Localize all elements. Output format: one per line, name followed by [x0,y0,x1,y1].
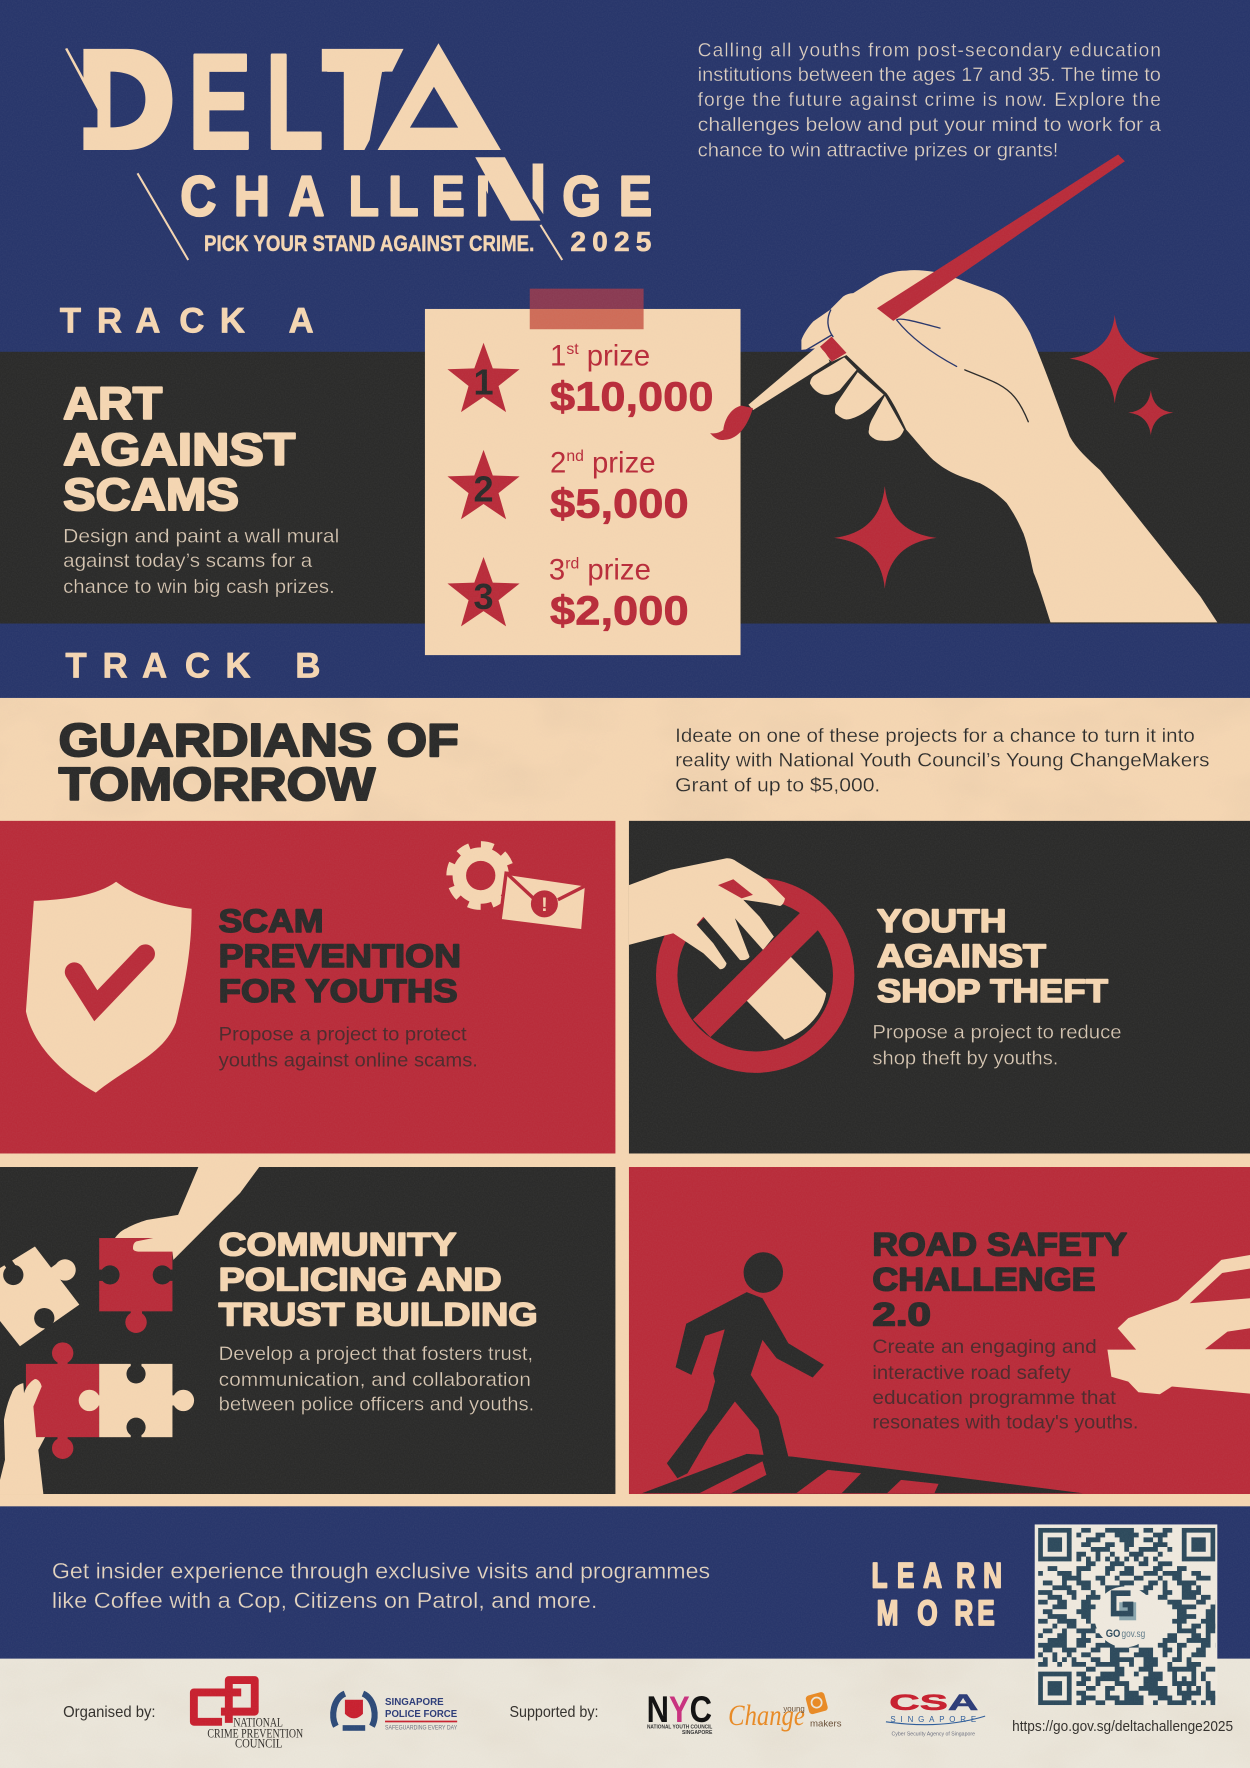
prize 1 [447,339,713,419]
panel background [629,821,1250,1153]
sparkle large [1070,315,1160,404]
GoGov logo disc [1094,1586,1155,1647]
footer paper texture [0,1659,1250,1768]
heading: FOR YOUTHS [219,972,458,1009]
upper red piece [98,1238,174,1333]
upper hand [115,1167,259,1260]
heading: CHALLENGE [872,1260,1096,1297]
logo: National Youth Council: NYC [647,1688,712,1730]
band: navy call to action [0,1506,1250,1659]
panel: Community Policing and Trust Building [0,1167,615,1494]
label: organised by: Organised by: [63,1704,156,1721]
heading: PREVENTION [219,937,461,974]
label: supported by: Supported by: [509,1704,599,1721]
logo: National Crime Prevention Council: CRIME PREVENTION [207,1727,303,1741]
heading [872,1226,1127,1332]
description [872,1337,1138,1434]
title word: DELTA: DELT [92,25,385,177]
prize 1: 1 [474,362,494,403]
QR modules [1038,1528,1225,1705]
intro text: forge the future against crime is now. Explore the [698,90,1161,111]
icon: car [1107,1255,1250,1394]
heading: SCAM [219,902,323,939]
joined red piece [26,1342,99,1459]
tagline: PICK YOUR STAND AGAINST CRIME. [204,231,534,256]
learn more label: LEARN [872,1556,1002,1596]
description: Propose a project to reduce [872,1022,1122,1043]
GoGov logo disc: GO [1106,1628,1121,1640]
heading: Art Against Scams: AGAINST [63,424,296,475]
panel: Scam Prevention for Youths [0,821,615,1153]
call to action text: like Coffee with a Cop, Citizens on Patrol, and more. [52,1588,597,1613]
prize 2: 2 [474,469,494,510]
prize 3: prize [579,554,651,587]
panel: prize note [425,289,741,655]
icon: no sign bar [702,920,810,1028]
logo: National Youth Council: NATIONAL YOUTH COUNCIL [647,1725,712,1731]
brush lower shaft [820,337,846,362]
hand palm and arm [801,270,1217,622]
track B description: reality with National Youth Council’s Young ChangeMakers [675,751,1209,772]
icon: gear and envelope: ! [541,895,548,916]
track B description: Ideate on one of these projects for a chance to turn it into [675,726,1195,747]
logo: Young ChangeMakers: Change [728,1700,805,1732]
prize 1: 1 [550,339,566,372]
description [872,1022,1122,1069]
brush head [710,406,753,440]
learn more label: MORE [877,1593,995,1633]
logo: Young ChangeMakers [728,1691,842,1732]
band: footer paper [0,1659,1250,1768]
band: track B cream backing [0,698,1250,1506]
prize 1: st [566,341,579,358]
description: between police officers and youths. [219,1395,534,1416]
panel background [629,1167,1250,1494]
heading: Art Against Scams: SCAMS [63,469,239,520]
description: education programme that [872,1388,1117,1409]
prize 3: $2,000 [550,588,689,634]
prize 2: nd [566,448,584,465]
description: communication, and collaboration [219,1370,531,1391]
logo: Cyber Security Agency of Singapore: CS A [889,1690,978,1715]
heading: SHOP THEFT [877,972,1108,1009]
prize 3 [447,554,689,634]
call to action text [52,1559,710,1613]
sparkle small [1128,390,1173,435]
prize 2: $5,000 [550,481,689,527]
heading: Art Against Scams: ART [63,378,163,429]
heading [877,902,1108,1009]
lower hand [0,1379,45,1494]
icon: stolen item cap [718,879,753,898]
heading: Guardians of Tomorrow: GUARDIANS OF [59,714,459,766]
logo: Delta Challenge title [65,25,652,260]
prize 3: rd [565,555,579,572]
description: against today’s scams for a [63,550,312,572]
icon: crosswalk [642,1454,1083,1493]
intro text [698,40,1161,162]
tape [530,289,644,329]
heading: COMMUNITY [219,1226,457,1263]
heading: POLICING AND [219,1260,502,1297]
sparkle lower [834,486,937,589]
heading: ROAD SAFETY [872,1226,1127,1263]
QR URL: https://go.gov.sg/deltachallenge2025 [1012,1719,1233,1735]
prize 2: 2 [550,446,566,479]
heading: YOUTH [877,902,1007,939]
paper mottling on cream [0,698,1250,820]
note paper [425,309,741,655]
heading: AGAINST [877,937,1046,974]
heading: 2.0 [872,1295,931,1332]
description [219,1344,534,1416]
icon: reaching hand [629,858,785,969]
logo: Young ChangeMakers: young [783,1705,805,1714]
panel: Art Against Scams [63,378,339,598]
QR code [1035,1524,1225,1705]
joined cream piece [79,1363,194,1438]
middle finger [810,357,857,395]
hand crease lines [807,310,1028,422]
year: 2025 [570,225,651,257]
QR background [1035,1524,1217,1705]
prize 1: $10,000 [550,373,713,419]
loose cream piece [0,1247,79,1346]
heading: Guardians of Tomorrow: TOMORROW [59,758,376,810]
logo: National Crime Prevention Council: NATIONAL [233,1715,283,1729]
heading: Track A: TRACKA [60,302,314,341]
GoGov logo disc: gov.sg [1122,1629,1145,1640]
prize 3: 3 [549,554,565,587]
heading: Guardians of Tomorrow [59,714,459,810]
heading: Art Against Scams [63,378,296,520]
intro text: institutions between the ages 17 and 35. The time to [698,65,1161,86]
title word: CHALLENGE: CHALLENGE [180,165,652,228]
logo: National Crime Prevention Council: COUNCIL [235,1737,282,1751]
intro text: challenges below and put your mind to work for a [698,115,1161,136]
logo: Singapore Police Force: SAFEGUARDING EVERY DAY [385,1725,457,1732]
logo: Cyber Security Agency of Singapore: SINGAPORE [890,1715,976,1724]
logo: Singapore Police Force: POLICE FORCE [385,1709,457,1720]
heading [219,902,461,1009]
icon: gear and envelope [450,845,587,931]
description [219,1025,478,1072]
logo: National Crime Prevention Council [194,1680,303,1751]
description: resonates with today's youths. [872,1413,1138,1434]
logo: Singapore Police Force: SINGAPORE [385,1697,444,1708]
track B description [675,726,1209,797]
band: track A dark band [0,352,1250,624]
prize 3: 3 [474,576,494,617]
panel: Youth Against Shop Theft [629,821,1250,1153]
logo: Singapore Police Force [333,1694,457,1732]
illustration: hand holding brush [710,154,1217,622]
learn more label [872,1556,1002,1633]
description: Create an engaging and [872,1337,1097,1358]
icon: shield with check [26,882,192,1093]
icon: puzzle pieces [0,1167,259,1494]
heading [219,1226,538,1332]
description: Develop a project that fosters trust, [219,1344,533,1365]
intro text: Calling all youths from post-secondary education [698,40,1161,61]
panel background [0,821,615,1153]
track B description: Grant of up to $5,000. [675,776,880,797]
title word: DELTA [65,25,501,177]
brush shaft [877,154,1125,321]
description [63,525,339,598]
description: interactive road safety [872,1363,1071,1384]
icon: lipstick [746,956,826,1040]
logo: Young ChangeMakers: makers [810,1718,842,1728]
description: shop theft by youths. [872,1048,1058,1069]
heading: Track B: TRACKB [65,647,321,686]
prize 2 [447,446,689,527]
icon: pedestrian [667,1252,824,1480]
call to action text: Get insider experience through exclusive visits and programmes [52,1559,710,1584]
prize 1: prize [579,339,650,372]
description: youths against online scams. [219,1051,478,1072]
logo: Cyber Security Agency of Singapore: Cyber Security Agency of Singapore [892,1731,975,1737]
brush handle [748,348,830,410]
panel background [0,1167,615,1494]
logo: National Youth Council: SINGAPORE [682,1730,713,1736]
intro text: chance to win attractive prizes or grants! [698,141,1058,162]
description: Propose a project to protect [219,1025,467,1046]
title word: DELTA: A [406,46,463,173]
ring finger [835,372,884,419]
description: Design and paint a wall mural [63,525,339,547]
slash lines [138,173,562,260]
logo: Cyber Security Agency of Singapore [886,1690,985,1737]
description: chance to win big cash prizes. [63,576,335,598]
prize 2: prize [584,446,656,479]
little finger [869,396,904,441]
icon: no sign ring [667,889,844,1062]
heading: TRUST BUILDING [219,1295,538,1332]
panel: Road Safety Challenge 2.0 [629,1167,1250,1494]
